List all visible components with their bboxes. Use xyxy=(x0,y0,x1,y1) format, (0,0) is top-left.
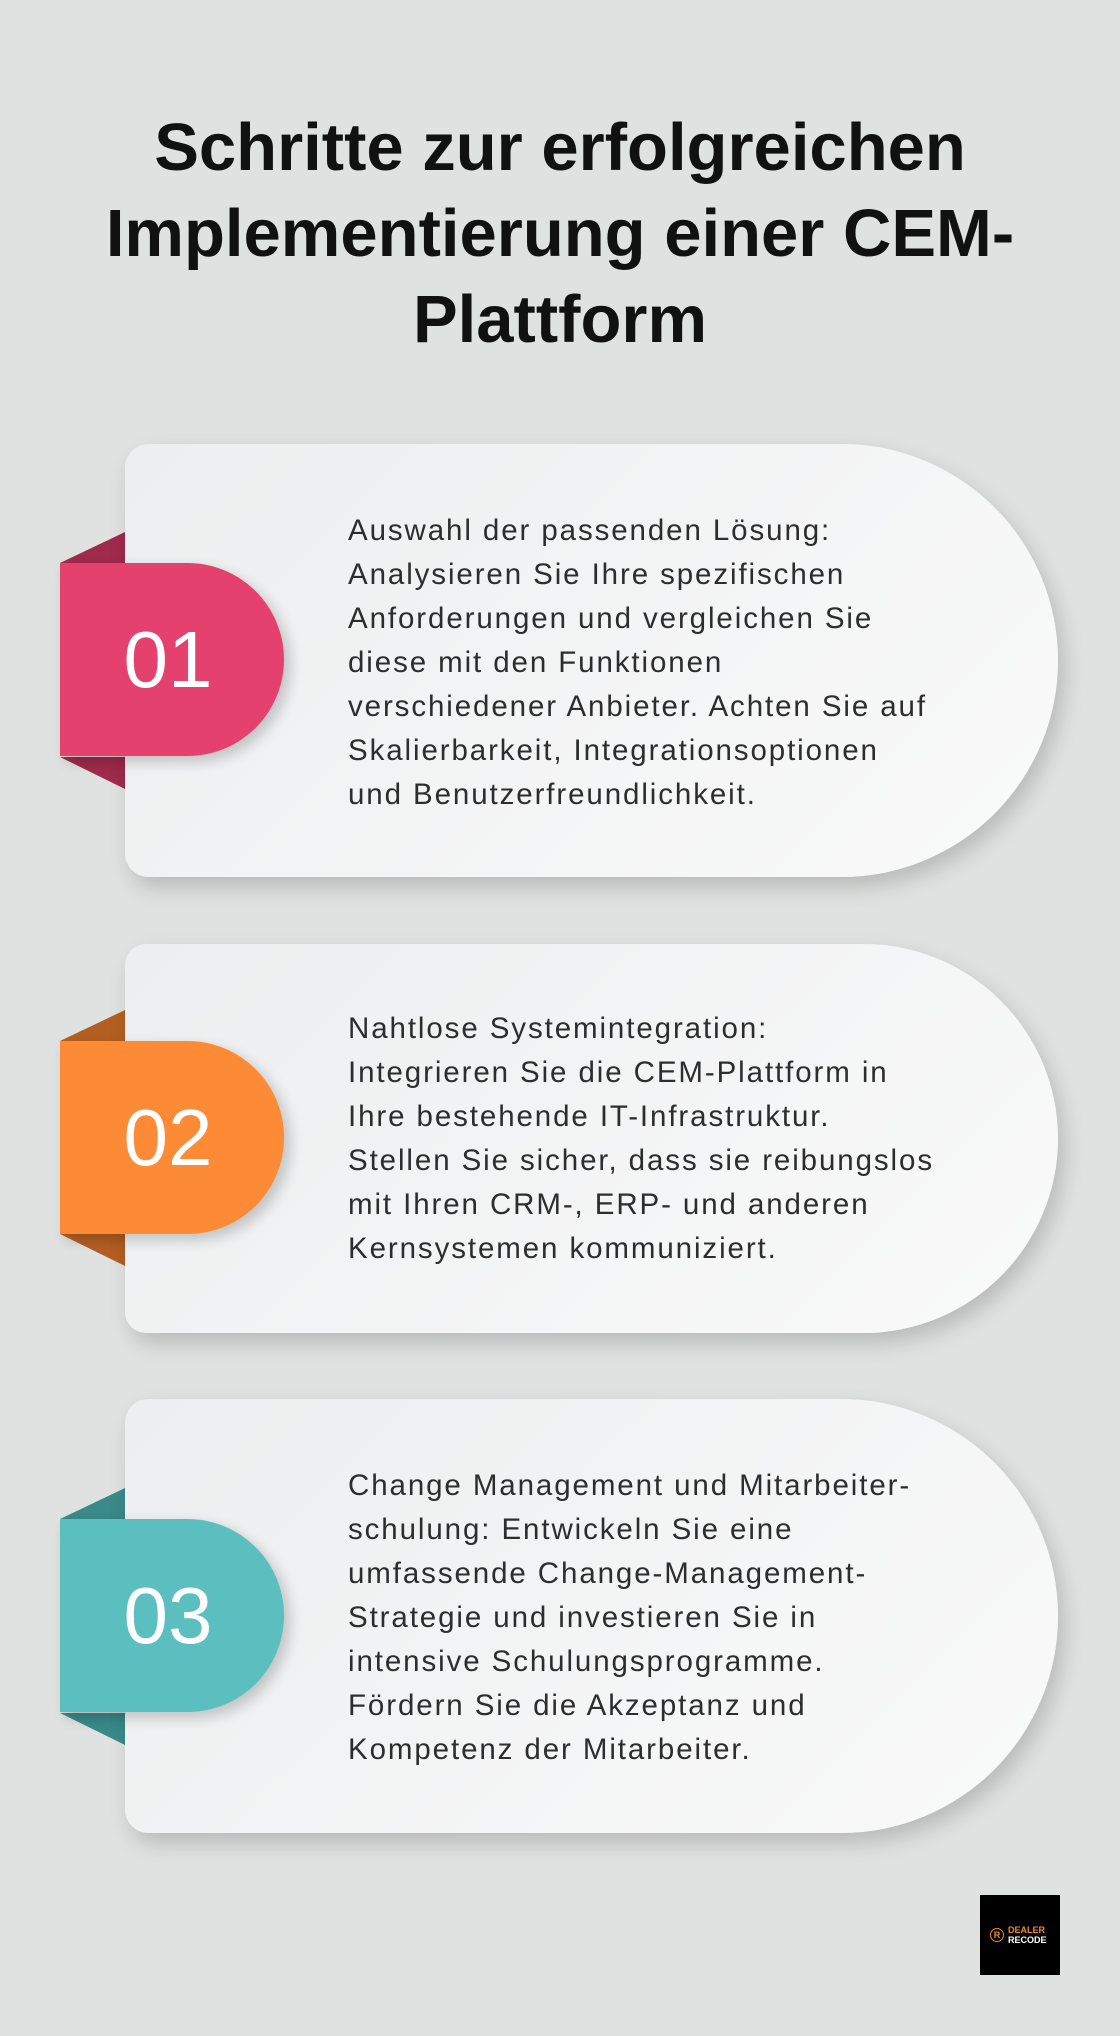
logo: R xyxy=(994,1930,1000,1940)
text step 2: Ihre bestehende IT-Infrastruktur. xyxy=(348,1100,830,1133)
logo: DEALER xyxy=(1008,1925,1045,1935)
text step 1: verschiedener Anbieter. Achten Sie auf xyxy=(348,690,927,723)
text step 1: diese mit den Funktionen xyxy=(348,646,723,679)
badge 02 xyxy=(60,1041,284,1234)
badge 01: 01 xyxy=(124,615,212,704)
text step 1: Skalierbarkeit, Integrationsoptionen xyxy=(348,734,879,767)
text step 2: Kernsystemen kommuniziert. xyxy=(348,1232,778,1265)
badge 01 xyxy=(60,563,284,756)
title: Plattform xyxy=(413,282,707,357)
text step 3: Fördern Sie die Akzeptanz und xyxy=(348,1689,807,1722)
text step 1: Auswahl der passenden Lösung: xyxy=(348,514,831,547)
logo: RECODE xyxy=(1008,1935,1047,1945)
text step 3 xyxy=(348,1469,911,1766)
text step 1: Anforderungen und vergleichen Sie xyxy=(348,602,873,635)
text step 2: mit Ihren CRM-, ERP- und anderen xyxy=(348,1188,870,1221)
logo xyxy=(980,1895,1060,1975)
panel: step 1 xyxy=(125,444,1058,877)
title xyxy=(106,110,1014,357)
text step 3: Kompetenz der Mitarbeiter. xyxy=(348,1733,752,1766)
panel: step 2 xyxy=(125,944,1058,1333)
text step 3: intensive Schulungsprogramme. xyxy=(348,1645,825,1678)
text step 1: Analysieren Sie Ihre spezifischen xyxy=(348,558,845,591)
text step 1: und Benutzerfreundlichkeit. xyxy=(348,778,757,811)
text step 3: schulung: Entwickeln Sie eine xyxy=(348,1513,793,1546)
title: Schritte zur erfolgreichen xyxy=(154,110,966,185)
text step 3: Strategie und investieren Sie in xyxy=(348,1601,817,1634)
text step 3: umfassende Change-Management- xyxy=(348,1557,867,1590)
text step 2: Nahtlose Systemintegration: xyxy=(348,1012,768,1045)
badge 02: 02 xyxy=(124,1093,212,1182)
text step 2: Integrieren Sie die CEM-Plattform in xyxy=(348,1056,889,1089)
title: Implementierung einer CEM- xyxy=(106,196,1014,271)
text step 1 xyxy=(348,514,927,811)
panel: step 3 xyxy=(125,1399,1058,1833)
badge 03: 03 xyxy=(124,1571,212,1660)
text step 2: Stellen Sie sicher, dass sie reibungslos xyxy=(348,1144,934,1177)
text step 2 xyxy=(348,1012,934,1265)
text step 3: Change Management und Mitarbeiter- xyxy=(348,1469,911,1502)
badge 03 xyxy=(60,1519,284,1712)
